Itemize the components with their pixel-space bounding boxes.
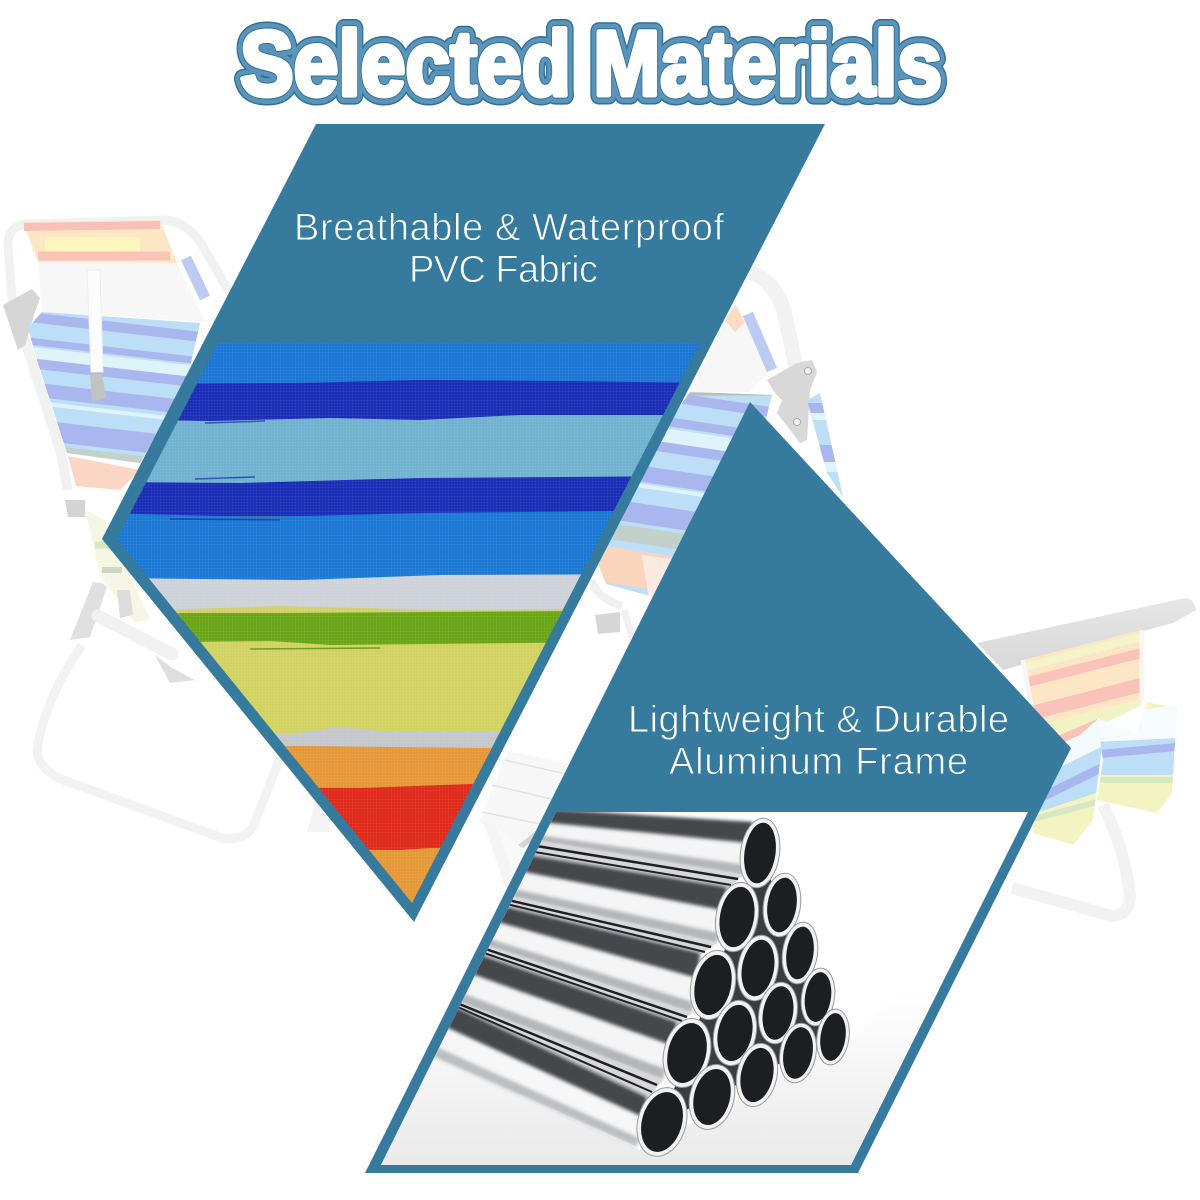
fabric label [294, 207, 724, 291]
stripe flecks [170, 421, 280, 520]
panel: aluminum frame [365, 402, 1071, 1173]
chair back frame [8, 220, 228, 300]
floor shadow [381, 990, 939, 1165]
side strip right [807, 393, 843, 497]
lower frame curve [592, 580, 622, 606]
tube 1 [534, 812, 754, 889]
tube 4 [458, 954, 679, 1098]
cross bar [98, 616, 172, 654]
table leg [483, 822, 520, 893]
fabric label: Breathable & Waterproof [294, 207, 724, 249]
folding leg loop [37, 645, 280, 839]
side table [479, 751, 575, 845]
weave texture [100, 340, 720, 910]
stack gap shading [674, 880, 819, 1110]
narrow upper strip [748, 314, 772, 370]
tube openings [634, 821, 849, 1157]
teal diamond background [102, 124, 825, 922]
right leg [1012, 805, 1130, 916]
left cup holder [1033, 720, 1102, 845]
title: Selected Materials [240, 13, 942, 115]
pocket stripes [28, 312, 200, 463]
clamp [595, 612, 620, 634]
leg hinges [70, 582, 107, 640]
faded chair: centre and right side [479, 272, 1196, 916]
white image area [381, 812, 1028, 1165]
aluminum label: Lightweight & Durable [628, 699, 1009, 741]
tube 3 [484, 906, 702, 1024]
title: Selected Materials [240, 13, 942, 115]
strap [87, 270, 103, 372]
middle pocket stripes [598, 392, 772, 596]
lower fabric patch [68, 456, 140, 490]
small foot [307, 785, 330, 832]
hinge [3, 289, 40, 350]
hanging pocket stripes [1024, 630, 1142, 742]
tube 5 [434, 1006, 648, 1148]
aluminum tubes image [381, 812, 939, 1165]
teal frame background [365, 402, 1071, 1173]
fabric swatch [100, 340, 720, 910]
lower back strip [85, 510, 150, 622]
faded chair: left side [3, 220, 330, 839]
side strip [186, 258, 205, 298]
white upper fabric [690, 300, 770, 392]
white mid fabric [38, 262, 205, 322]
panel: PVC fabric [100, 124, 825, 922]
armrest [977, 598, 1196, 670]
right cup holder [1095, 700, 1180, 815]
side clamp [65, 500, 85, 517]
fabric label: PVC Fabric [409, 249, 598, 291]
tube 2 [508, 854, 729, 955]
title: Selected Materials [240, 13, 942, 115]
aluminum label [628, 699, 1009, 783]
top fabric stripes [23, 220, 177, 263]
tube ends [629, 816, 853, 1162]
metal hinge [767, 360, 817, 443]
title: Selected Materials [240, 13, 942, 115]
aluminum label: Aluminum Frame [669, 741, 968, 783]
upper arch frame [748, 272, 796, 368]
